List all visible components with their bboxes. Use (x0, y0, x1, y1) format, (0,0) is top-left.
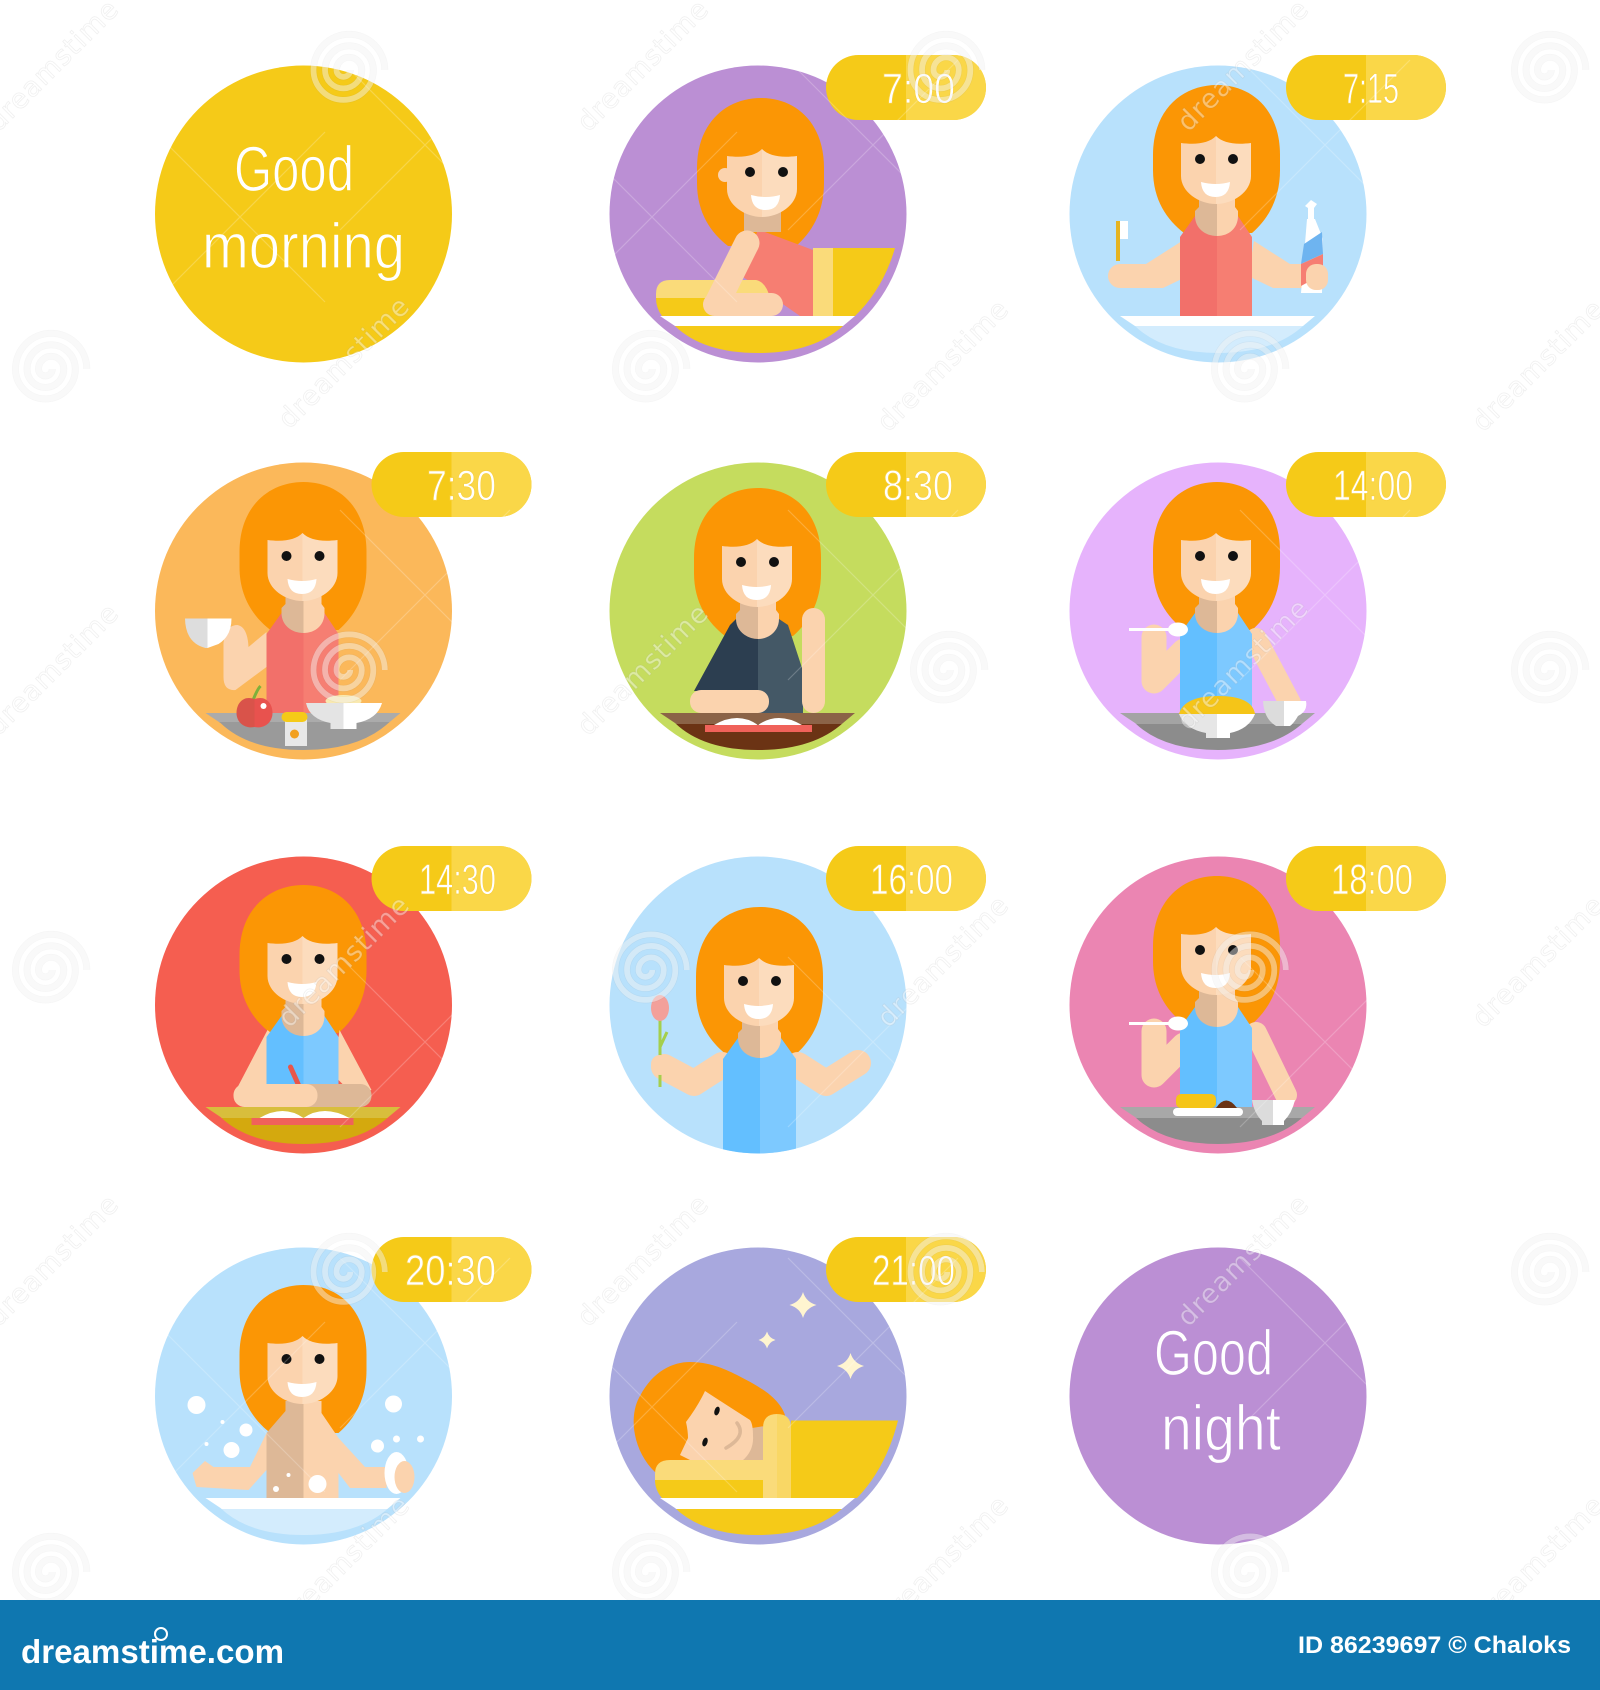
icon: toothpaste (1301, 200, 1328, 293)
pill: 14:00: 14:00 (1333, 462, 1413, 510)
pill: 20:30: 20:30 (405, 1247, 496, 1295)
watermark: diagonal text: dreamstime (272, 890, 416, 1034)
icon: open book (252, 1111, 354, 1125)
pill: 18:00 (1286, 846, 1446, 911)
character: girl writing (234, 885, 372, 1116)
panel: 21:00 sleep (610, 1237, 986, 1549)
icon: open book (705, 718, 812, 732)
desk (660, 713, 855, 750)
panel: 7:30 breakfast (155, 452, 532, 762)
watermark: diagonal text: dreamstime (871, 294, 1015, 438)
icon: apple (236, 686, 272, 727)
panel: 18:00 dinner (1070, 846, 1446, 1158)
icon: bowl (1252, 1100, 1295, 1125)
pill: 16:00 (826, 846, 986, 911)
pill: 18:00: 18:00 (1331, 856, 1413, 904)
heading: good night: Good (1154, 1317, 1273, 1389)
pill: 7:30: 7:30 (427, 462, 496, 510)
sink (1120, 316, 1315, 353)
bed base (660, 1498, 855, 1535)
character: girl with toothbrush (1108, 85, 1328, 316)
table (1120, 713, 1315, 750)
pill: 7:30 (372, 452, 532, 517)
panel: good morning (155, 66, 452, 362)
arm (703, 243, 783, 316)
character: sleeping girl (634, 1362, 785, 1472)
pill: 21:00: 21:00 (872, 1247, 955, 1295)
icon: cup (1263, 701, 1306, 726)
watermark: diagonal text: dreamstime (871, 1490, 1015, 1634)
character: girl with cup (224, 482, 366, 713)
watermark: diagonal text: dreamstime (1171, 1189, 1315, 1333)
pill: 20:30 (372, 1237, 532, 1302)
footer credit: ID 86239697 © Chaloks (1298, 1632, 1571, 1659)
panel: 7:15 brushing teeth (1070, 55, 1446, 366)
stars (758, 1292, 864, 1379)
bed: pillow and blanket (655, 1414, 898, 1498)
panel: 14:00 lunch (1070, 452, 1446, 764)
pill: 16:00: 16:00 (870, 856, 953, 904)
watermark: diagonal text: dreamstime (571, 1189, 715, 1333)
pill: 7:00 (826, 55, 986, 120)
watermark: diagonal text: dreamstime (1171, 593, 1315, 737)
heading: good morning: Good (234, 133, 354, 205)
icon: porridge bowl (306, 695, 382, 729)
character: girl with rose (664, 907, 858, 1155)
pill: 14:30 (372, 846, 532, 911)
heading: good night (1154, 1317, 1281, 1464)
pill: 7:15 (1286, 55, 1446, 120)
footer logo: dreamstime.com (21, 1633, 284, 1670)
icon: juice jar (282, 712, 308, 746)
bed base (660, 316, 855, 353)
icon: bowl of food (1179, 696, 1255, 738)
icon: spoon (1129, 1016, 1188, 1030)
bed: pillow and blanket (656, 248, 895, 316)
panel: good night (1070, 1248, 1366, 1544)
panel: 8:30 study (610, 452, 986, 764)
character: girl reading (690, 488, 825, 713)
icon: plate of food (1173, 1094, 1243, 1116)
icon: rose (651, 995, 669, 1087)
icon: toothbrush (1116, 221, 1128, 261)
panel: 16:00 walk with flower (610, 846, 986, 1155)
character: girl waking up (697, 98, 824, 316)
bathtub (206, 1498, 400, 1535)
footer bar (0, 1600, 1600, 1690)
watermark: diagonal text: dreamstime (871, 890, 1015, 1034)
watermark: diagonal text: dreamstime (571, 598, 715, 742)
pill: 21:00 (826, 1237, 986, 1302)
pill: 14:30: 14:30 (419, 856, 496, 904)
icon: soap sponge (384, 1452, 414, 1494)
panel: 20:30 bath (155, 1237, 532, 1549)
desk (206, 1107, 400, 1144)
watermark: diagonal text: dreamstime (272, 291, 416, 435)
panel: 7:00 waking up (610, 55, 986, 366)
pill: 14:00 (1286, 452, 1446, 517)
pill: 8:30 (826, 452, 986, 517)
pill: 8:30: 8:30 (883, 462, 953, 510)
icon: cup (185, 618, 232, 648)
panel: 14:30 homework (155, 846, 532, 1158)
table (206, 713, 400, 750)
bubbles (188, 1396, 424, 1493)
watermark: diagonal text: dreamstime (272, 1490, 416, 1634)
character: girl in bath (192, 1285, 386, 1498)
pill: 7:00: 7:00 (882, 65, 955, 113)
icon: spoon (1129, 622, 1188, 636)
heading: good morning (202, 133, 405, 282)
heading: good morning: morning (202, 210, 405, 282)
pill: 7:15: 7:15 (1343, 65, 1399, 113)
character: girl with spoon (1153, 876, 1286, 1107)
table (1120, 1107, 1315, 1144)
heading: good night: night (1161, 1392, 1281, 1464)
character: girl with spoon (1153, 482, 1290, 713)
